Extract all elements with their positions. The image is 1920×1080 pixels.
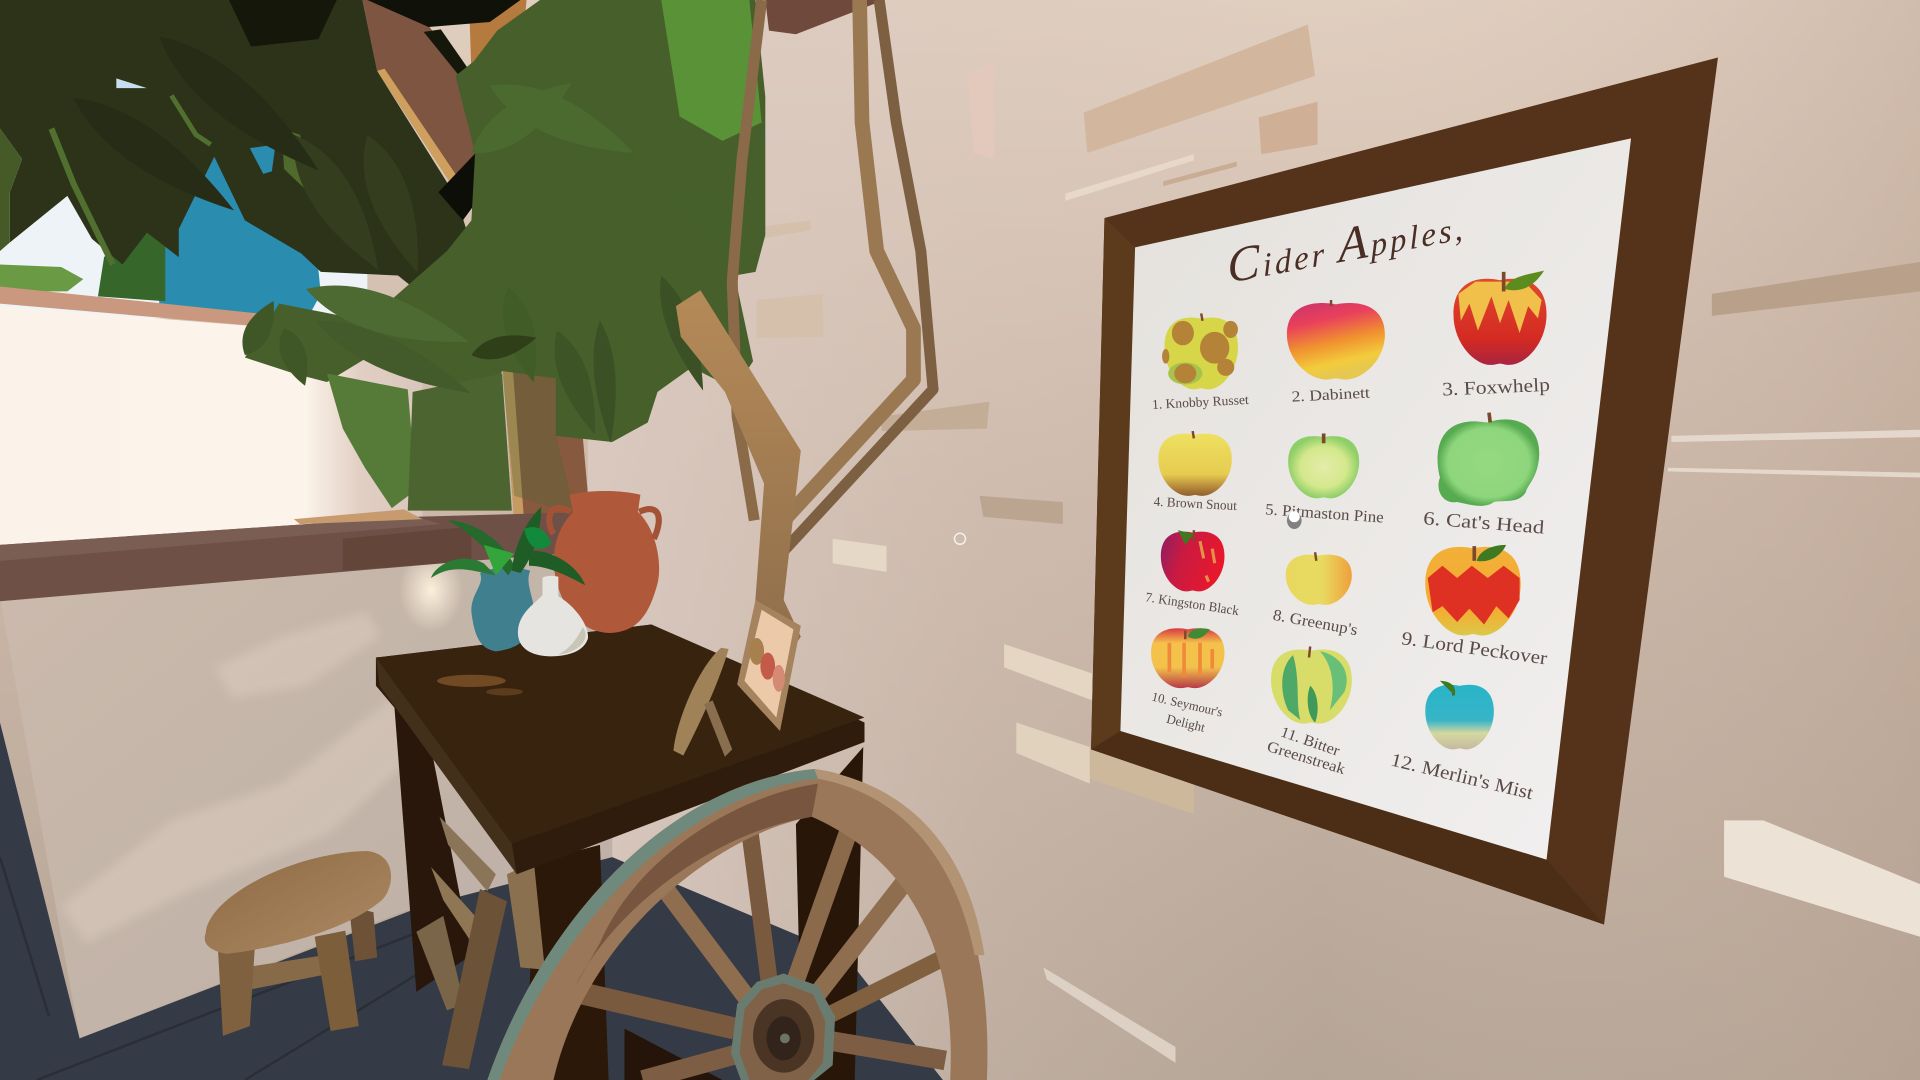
wall stains bbox=[61, 612, 422, 943]
apple 3: Foxwhelp bbox=[1453, 271, 1547, 365]
stool bbox=[205, 851, 391, 1036]
label 6: 6. Cat's Head bbox=[1422, 508, 1546, 539]
wheel hub bbox=[731, 973, 835, 1080]
wall shading overlay bbox=[588, 0, 1920, 1080]
table top bbox=[376, 624, 864, 874]
sunlight glow on wall bbox=[399, 549, 463, 632]
apple 2: Dabinett bbox=[1287, 300, 1385, 380]
apple 11: Bitter Greenstreak bbox=[1271, 647, 1352, 724]
crosshair reticle bbox=[954, 533, 966, 544]
label 9: 9. Lord Peckover bbox=[1400, 628, 1549, 670]
label 2: 2. Dabinett bbox=[1291, 385, 1371, 406]
wall plaster patches bbox=[757, 24, 1920, 1063]
roof overhang bbox=[765, 0, 884, 34]
swimming pool blue wall bbox=[159, 147, 321, 321]
apple 6: Cat's Head bbox=[1438, 413, 1539, 506]
vine branches bbox=[732, 0, 933, 551]
poster title: Cider Apples, bbox=[1226, 195, 1467, 294]
label 4: 4. Brown Snout bbox=[1153, 494, 1237, 513]
far wall coping tiles bbox=[0, 287, 282, 328]
label 8: 8. Greenup's bbox=[1272, 607, 1359, 639]
label 10: 10. Seymour's bbox=[1150, 690, 1224, 720]
lower left wall bbox=[0, 557, 612, 1038]
apple 10: Seymour's Delight bbox=[1151, 628, 1224, 688]
far white wall bbox=[0, 306, 422, 547]
table legs and shelf bbox=[394, 705, 863, 1080]
wheel spokes bbox=[576, 828, 951, 1080]
label 5: 5. Pitmaston Pine bbox=[1265, 501, 1384, 527]
terracotta jug bbox=[554, 491, 659, 633]
sky bbox=[0, 0, 367, 318]
white vase bbox=[518, 576, 588, 656]
apple 9: Lord Peckover bbox=[1425, 545, 1521, 636]
label 7: 7. Kingston Black bbox=[1144, 589, 1240, 618]
roof beam bbox=[362, 0, 527, 206]
distant bush bbox=[0, 214, 165, 301]
thick trunk bbox=[676, 290, 801, 680]
label 11 second line: Greenstreak bbox=[1265, 738, 1348, 778]
apple 4: Brown Snout bbox=[1158, 431, 1232, 496]
poster paper bbox=[1120, 138, 1631, 860]
label 1: 1. Knobby Russet bbox=[1152, 392, 1249, 412]
foliage: mid green leaves bbox=[234, 0, 765, 514]
label 3: 3. Foxwhelp bbox=[1442, 375, 1550, 401]
apple 12: Merlin's Mist bbox=[1425, 681, 1494, 749]
apple 7: Kingston Black bbox=[1161, 530, 1224, 591]
apple labels bbox=[1144, 375, 1550, 804]
wheel rim bbox=[487, 769, 987, 1080]
apple 1: Knobby Russet bbox=[1162, 313, 1238, 389]
apple 5: Pitmaston Pine bbox=[1288, 433, 1359, 498]
picture frame bbox=[1091, 58, 1718, 924]
tree trunk bbox=[502, 355, 590, 520]
apple 8: Greenup's bbox=[1286, 552, 1352, 605]
label 12: 12. Merlin's Mist bbox=[1389, 750, 1536, 804]
jug handles bbox=[549, 508, 659, 539]
plant bbox=[431, 507, 585, 585]
window sill bbox=[0, 509, 600, 601]
foliage: dark background leaves bbox=[0, 0, 520, 300]
floor bbox=[0, 722, 943, 1080]
framed picture on table bbox=[737, 600, 801, 731]
cursor dot bbox=[1287, 511, 1302, 529]
label 11: 11. Bitter bbox=[1278, 724, 1342, 760]
label 10 second line: Delight bbox=[1165, 712, 1207, 735]
frame back and stand bbox=[673, 648, 732, 757]
teal vase bbox=[471, 567, 534, 651]
